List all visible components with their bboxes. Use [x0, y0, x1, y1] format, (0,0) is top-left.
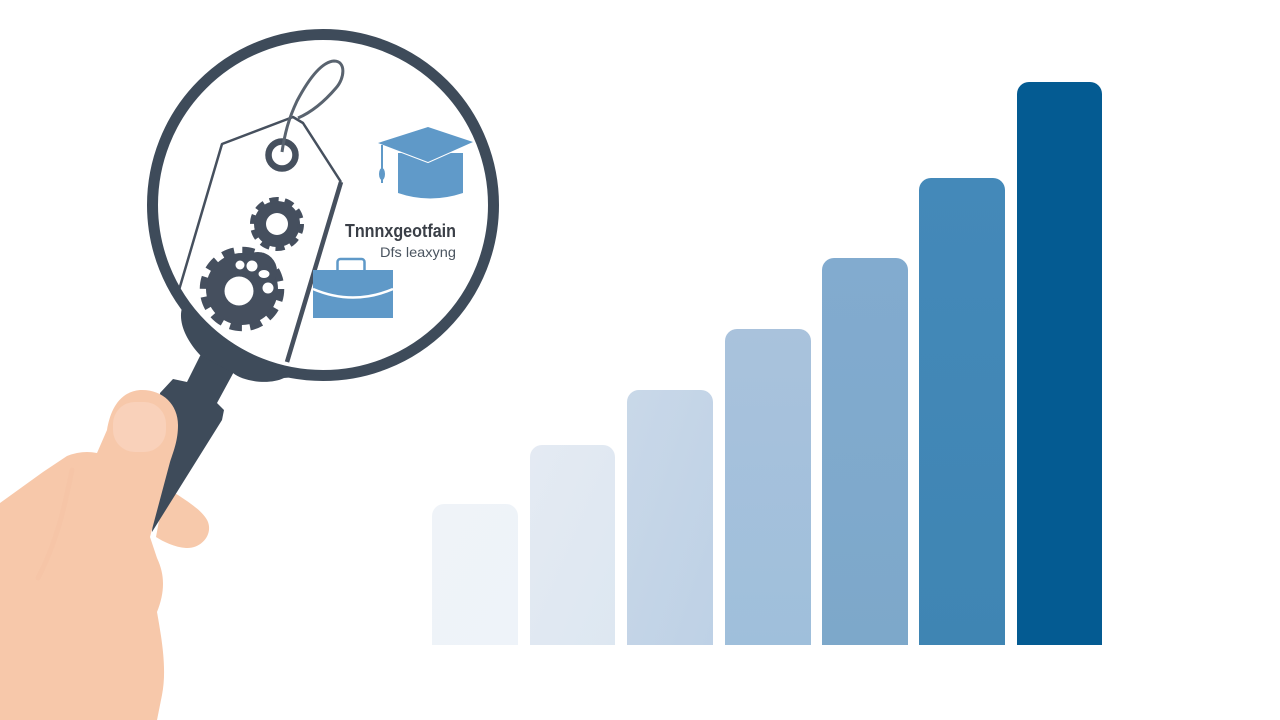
tag eyelet [268, 142, 296, 168]
handle [152, 352, 236, 532]
small gear icon [253, 200, 301, 248]
tag outline [179, 117, 341, 290]
briefcase handle [338, 259, 364, 273]
label line two: Dfs leaxyng [380, 244, 456, 260]
cap body [398, 153, 463, 198]
tassel [381, 145, 383, 183]
lens ring [152, 34, 494, 376]
collar [181, 300, 320, 382]
bar chart [432, 82, 1102, 645]
graduation cap icon [378, 127, 473, 198]
palm and thumb [0, 390, 178, 720]
tassel end [379, 168, 385, 180]
lower finger behind handle [156, 488, 209, 548]
thumbnail [113, 402, 166, 452]
bar 5 [822, 258, 908, 645]
briefcase icon [313, 259, 393, 318]
price tag icon [179, 61, 343, 362]
briefcase flap line [313, 289, 393, 298]
bar 6 [919, 178, 1005, 645]
cap board [378, 127, 473, 162]
bar 2 [530, 445, 615, 645]
palm crease [38, 470, 72, 578]
bar 4 [725, 329, 811, 645]
briefcase body [313, 270, 393, 318]
bar 7 [1017, 82, 1102, 645]
tag string [282, 61, 343, 152]
magnifying glass [152, 34, 494, 532]
hand [0, 390, 178, 720]
tag right edge [287, 182, 341, 362]
lens interior [157, 39, 489, 371]
label line one: Tnnnxgeotfain [345, 221, 456, 241]
lens label [345, 221, 456, 260]
large gear icon [204, 250, 280, 328]
bar 3 [627, 390, 713, 645]
bar 1 [432, 504, 518, 645]
